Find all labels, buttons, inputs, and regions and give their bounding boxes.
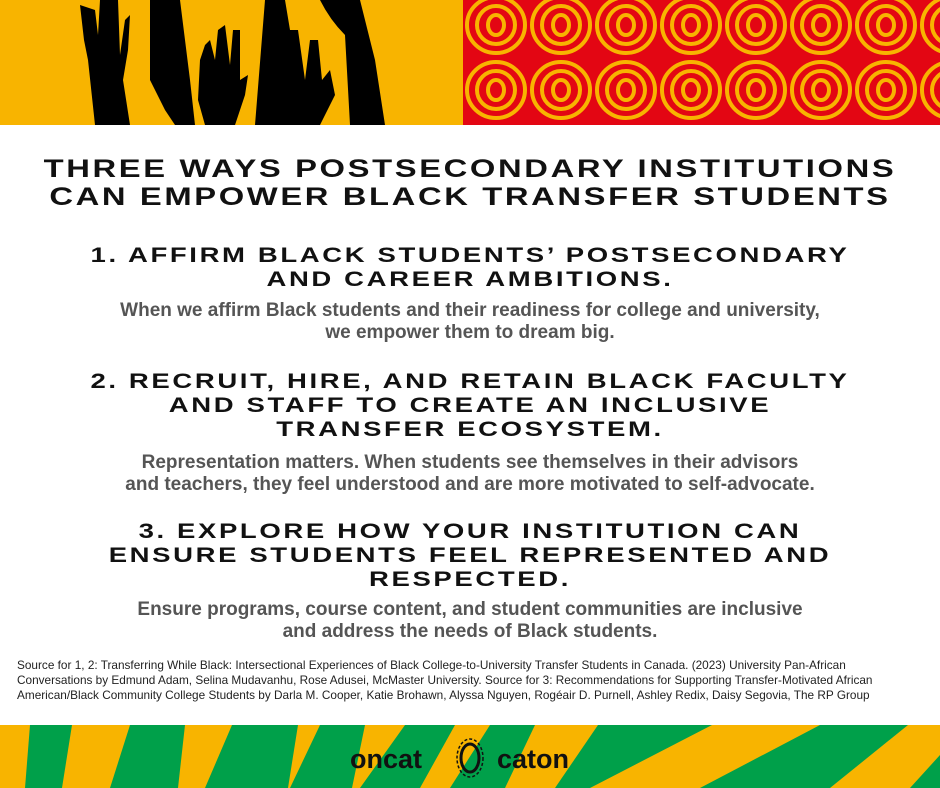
text 3: and address the needs of Black students. [283, 621, 657, 642]
sources: American/Black Community College Students by Darla M. Cooper, Katie Brohawn, Alyssa Nguyen, Rogéair D. Purnell, Ashley Redix, Daisy Segovia, The RP Group [17, 688, 870, 702]
heading 2: TRANSFER ECOSYSTEM. [276, 418, 664, 441]
sources [17, 658, 872, 702]
heading 1: AND CAREER AMBITIONS. [266, 268, 674, 291]
text 3 [137, 599, 803, 642]
text 1: When we affirm Black students and their readiness for college and university, [120, 300, 820, 321]
title: THREE WAYS POSTSECONDARY INSTITUTIONS [44, 155, 896, 183]
heading 3: ENSURE STUDENTS FEEL REPRESENTED AND [109, 544, 831, 567]
top banner [0, 0, 940, 125]
title [44, 155, 896, 211]
logo: oncat [350, 744, 422, 774]
heading 3 [109, 520, 831, 591]
sources: Conversations by Edmund Adam, Selina Mudavanhu, Rose Adusei, McMaster University. Source for 3: Recommendations for Supporting Transfer-Motivated African [17, 673, 872, 687]
text 3: Ensure programs, course content, and student communities are inclusive [137, 599, 803, 620]
text 2: Representation matters. When students see themselves in their advisors [142, 452, 798, 473]
title: CAN EMPOWER BLACK TRANSFER STUDENTS [49, 183, 891, 211]
heading 1: 1. AFFIRM BLACK STUDENTS’ POSTSECONDARY [91, 244, 849, 267]
heading 2 [90, 370, 850, 441]
logo [350, 739, 569, 777]
heading 3: 3. EXPLORE HOW YOUR INSTITUTION CAN [139, 520, 801, 543]
sources: Source for 1, 2: Transferring While Black: Intersectional Experiences of Black College-to-University Transfer Students in Canada. (2023) University Pan-African [17, 658, 846, 672]
heading 2: AND STAFF TO CREATE AN INCLUSIVE [169, 394, 771, 417]
text 1: we empower them to dream big. [325, 322, 615, 343]
icon: raised hands [80, 0, 385, 125]
heading 1 [91, 244, 849, 291]
pattern: concentric circles [467, 0, 940, 118]
text 2: and teachers, they feel understood and are more motivated to self-advocate. [125, 474, 815, 495]
logo: caton [497, 744, 569, 774]
text 1 [120, 300, 820, 343]
text 2 [125, 452, 815, 495]
heading 3: RESPECTED. [369, 568, 571, 591]
bottom banner [0, 725, 940, 788]
heading 2: 2. RECRUIT, HIRE, AND RETAIN BLACK FACULTY [90, 370, 850, 393]
